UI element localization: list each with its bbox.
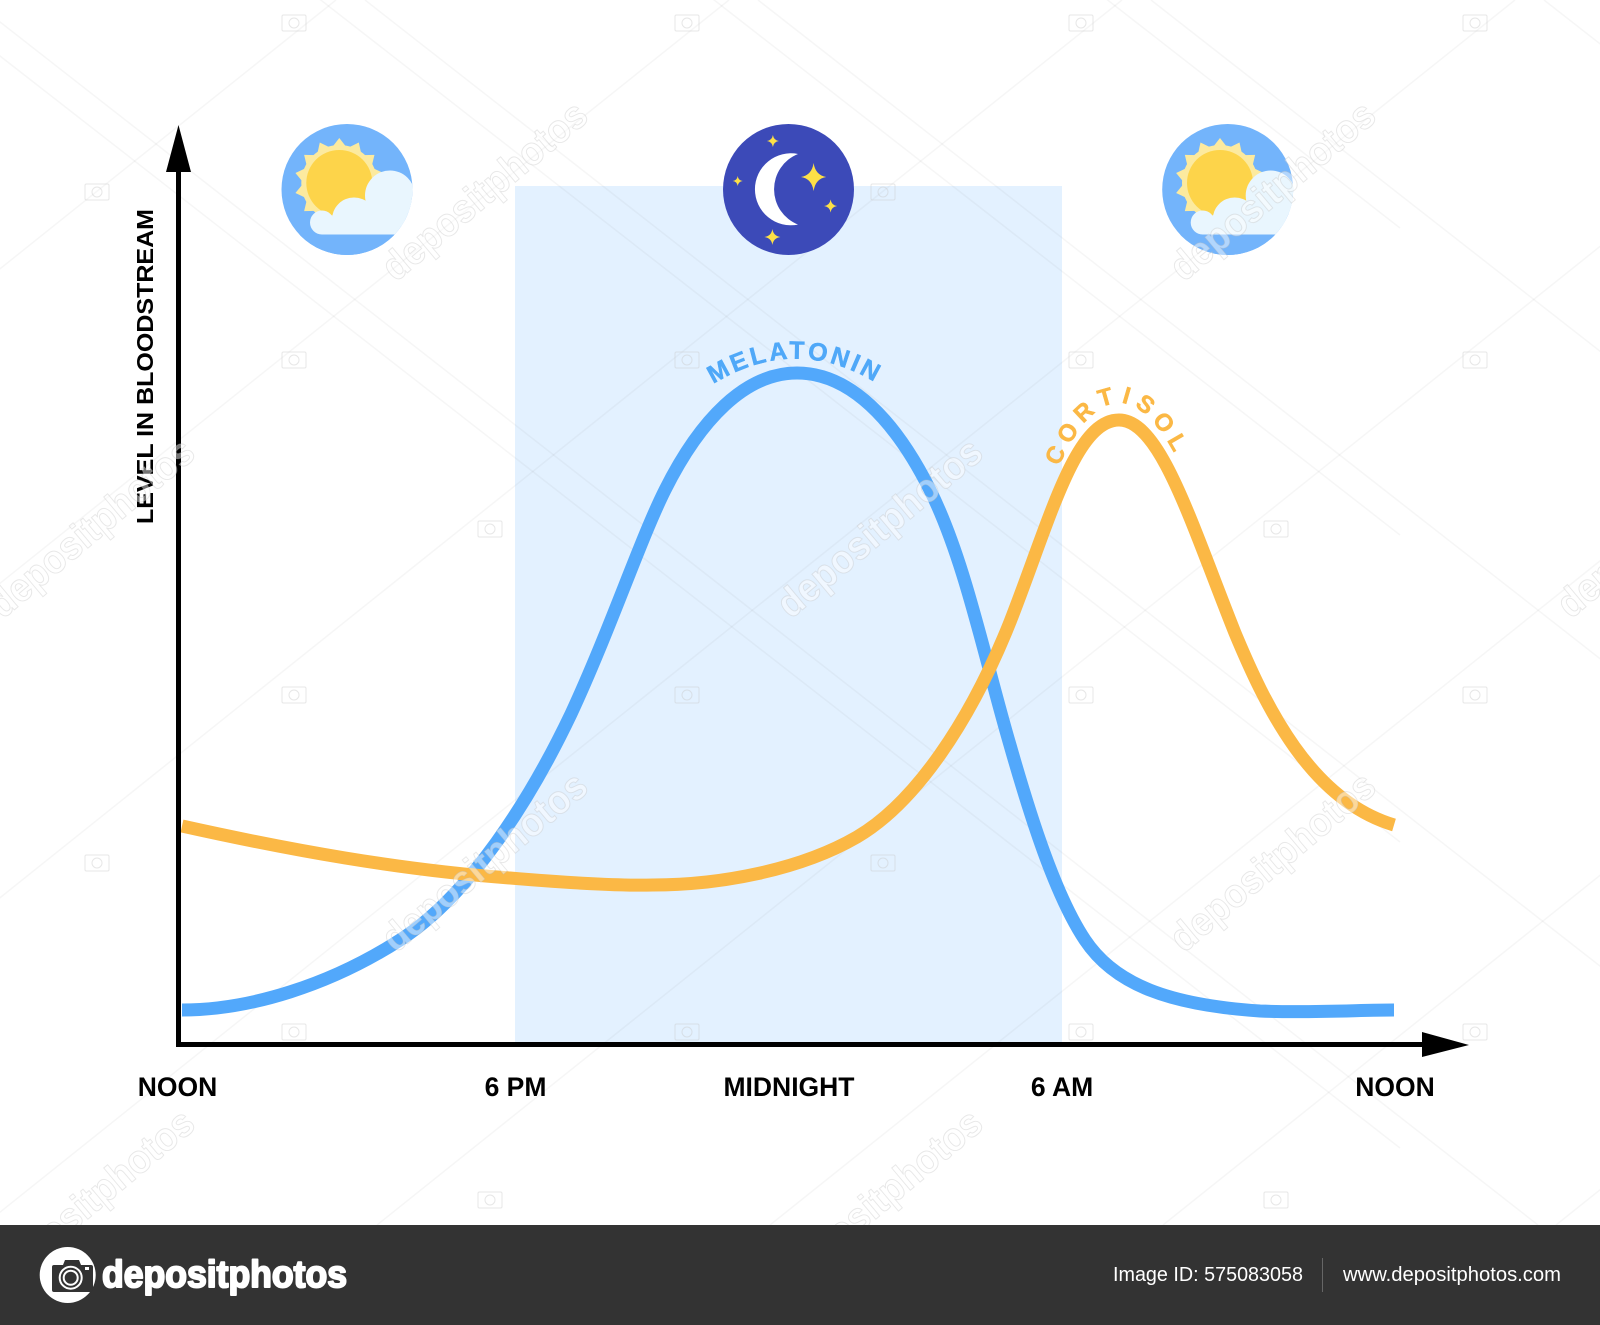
icon: sun with cloud (right) <box>1158 124 1301 260</box>
text: depositphotos <box>373 764 596 961</box>
label: midnight: MIDNIGHT <box>723 1072 855 1102</box>
text: depositphotos <box>768 1101 991 1298</box>
footer bar <box>0 1225 1600 1325</box>
cortisol curve <box>182 420 1394 885</box>
website url: www.depositphotos.com <box>1342 1264 1561 1286</box>
x axis labels <box>138 1072 1435 1102</box>
icon: sun with cloud (left) <box>277 124 420 260</box>
text: depositphotos <box>1161 93 1384 290</box>
cortisol label: CORTISOL <box>1046 386 1184 464</box>
x axis with arrow <box>176 1032 1469 1057</box>
logo wordmark: depositphotos <box>102 1254 347 1296</box>
y axis title: LEVEL IN BLOODSTREAM <box>132 209 158 524</box>
label: noon end: NOON <box>1355 1072 1435 1102</box>
label: 6 am: 6 AM <box>1031 1072 1093 1102</box>
night period shaded band <box>515 186 1062 1045</box>
melatonin label: MELATONIN <box>706 341 882 384</box>
divider <box>1322 1258 1323 1292</box>
text: depositphotos <box>768 430 991 627</box>
label: noon start: NOON <box>138 1072 217 1102</box>
text: depositphotos <box>373 93 596 290</box>
y axis with arrow <box>166 125 191 1047</box>
icon: camera logo <box>40 1247 96 1303</box>
icon: moon and stars <box>723 124 854 255</box>
melatonin curve <box>182 373 1394 1012</box>
text: depositphotos <box>1161 764 1384 961</box>
label: 6 pm: 6 PM <box>485 1072 546 1102</box>
image id: Image ID: 575083058 <box>1113 1264 1303 1286</box>
